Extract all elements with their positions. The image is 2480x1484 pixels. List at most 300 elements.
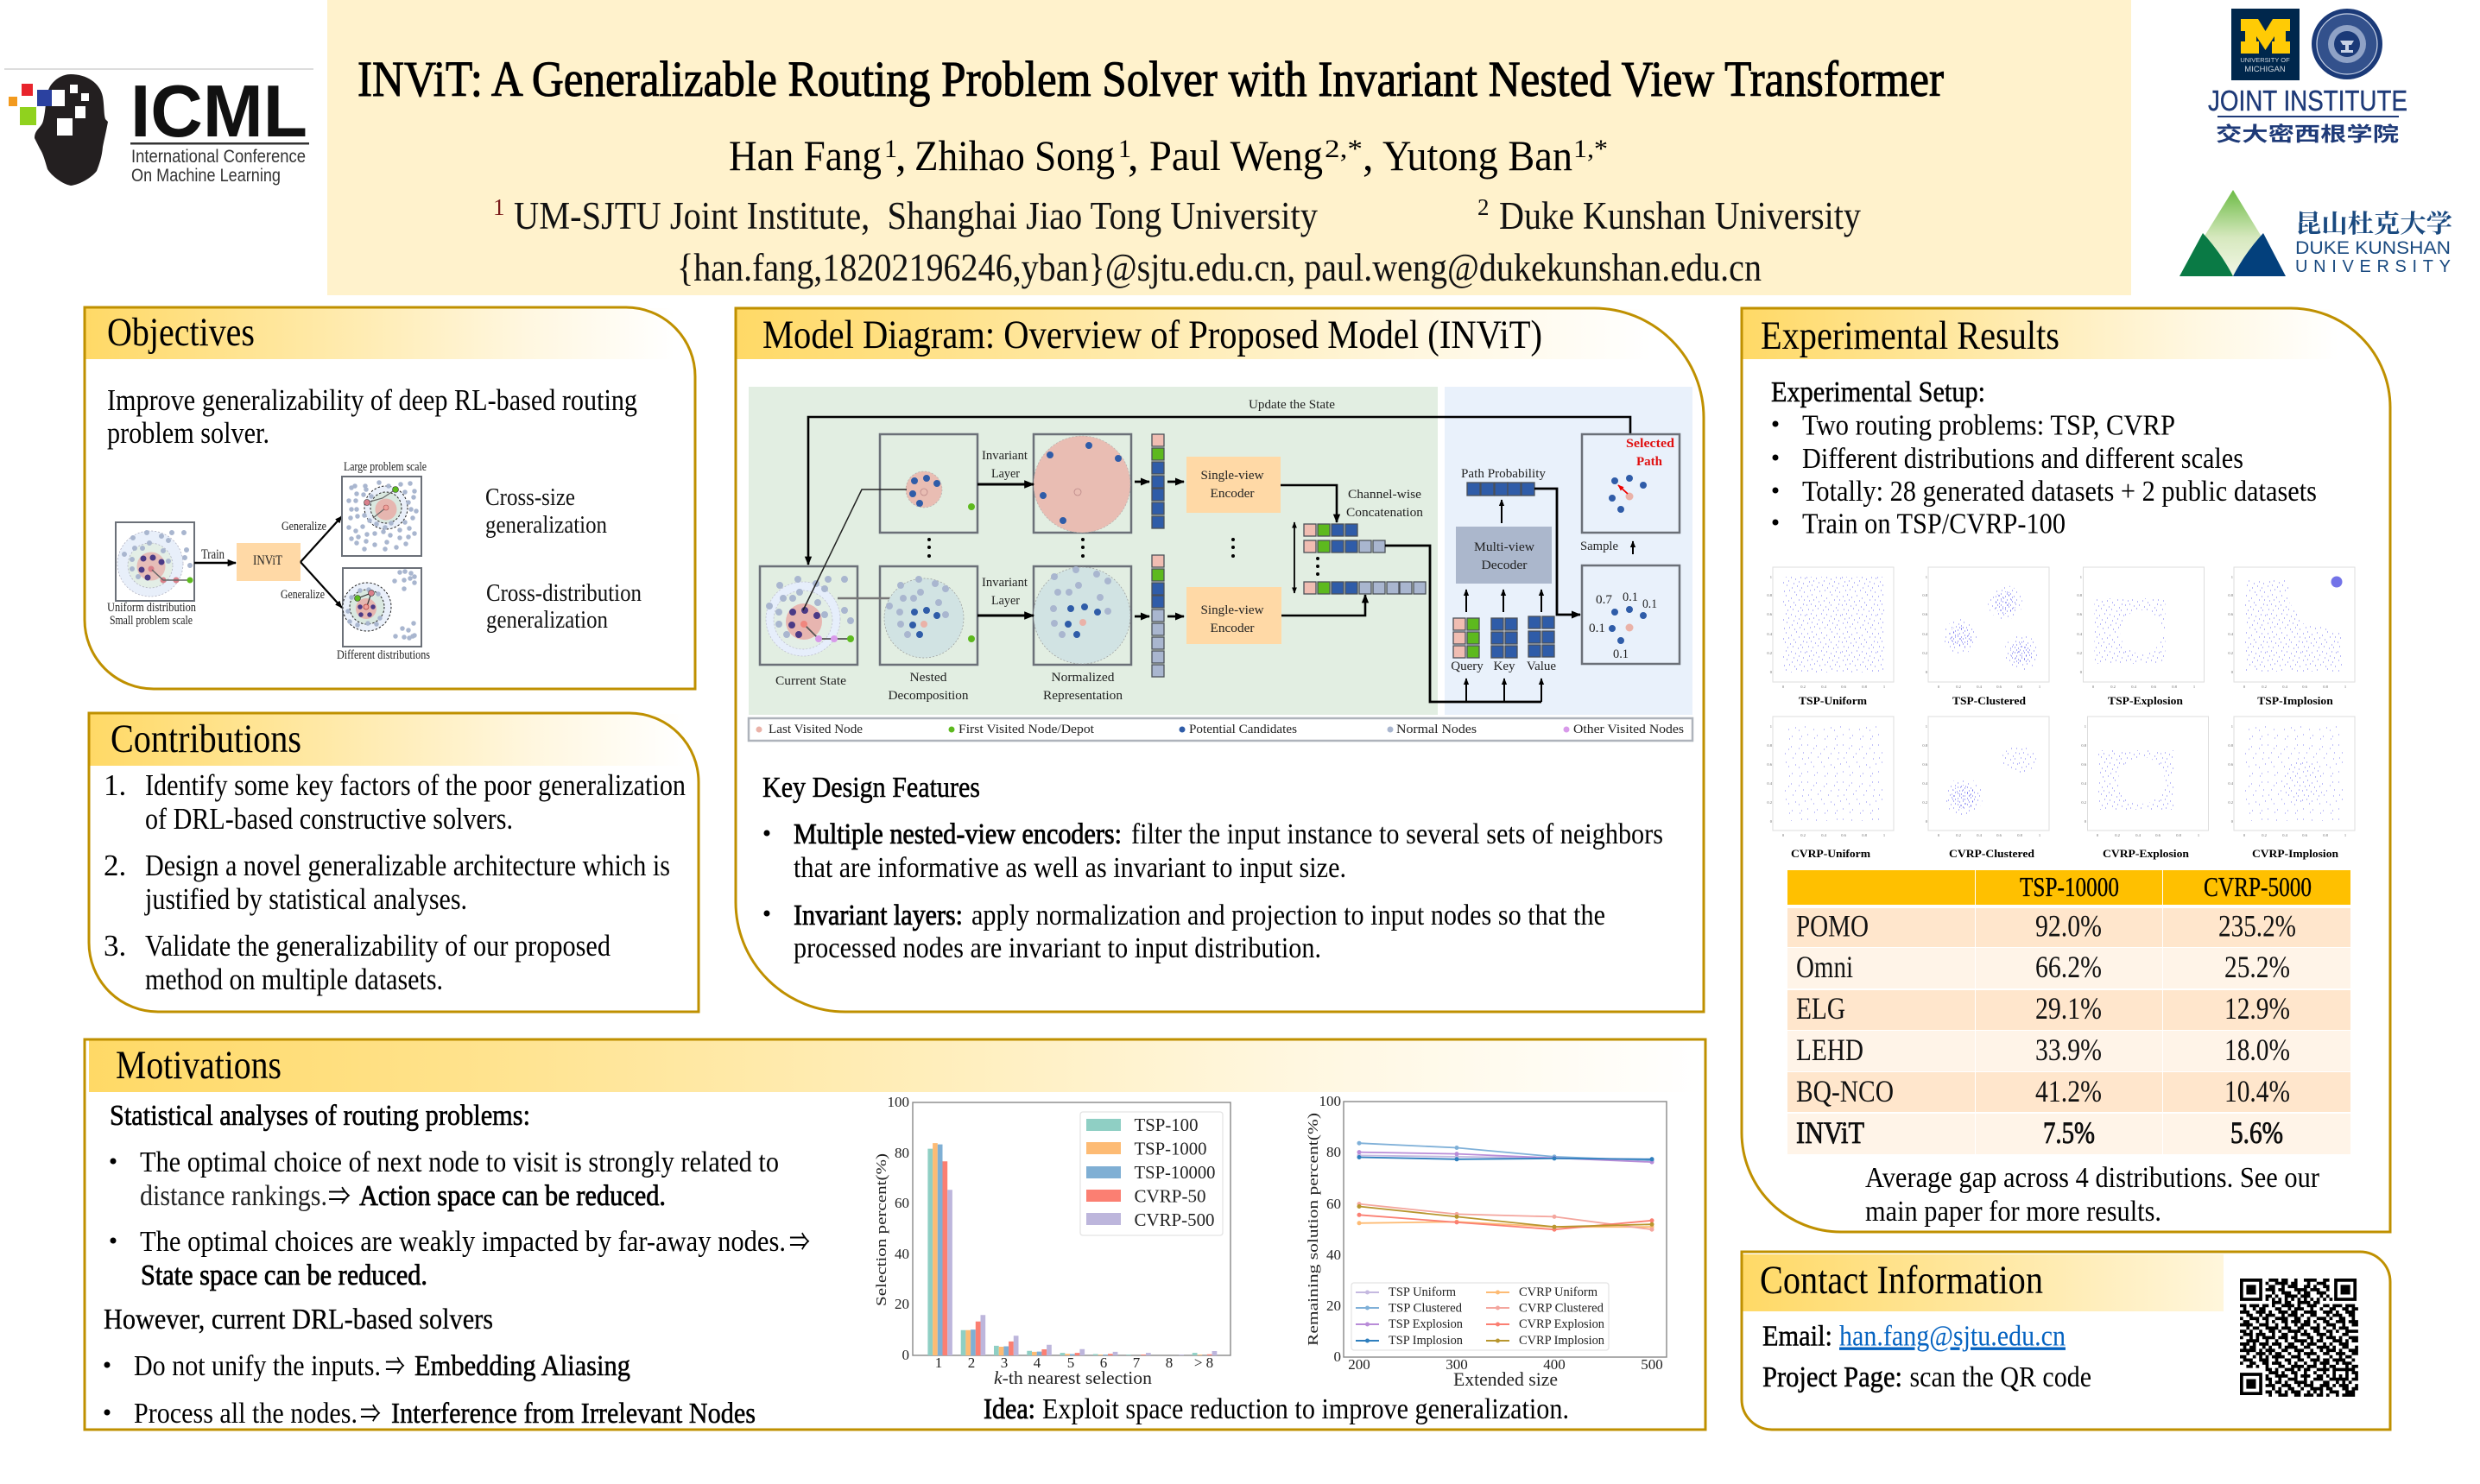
table note: [1865, 1162, 2320, 1228]
scatter: CVRP-Uniform: 0.4: [1821, 833, 1827, 837]
row: LEHD: 33.9%: [2035, 1032, 2102, 1067]
row: BQ-NCO: [1787, 1072, 2350, 1112]
logo: ICML: On Machine Learning: [131, 166, 281, 186]
contribution 3: 3.: [104, 929, 126, 963]
label: channel-wise concatenation: Channel-wise: [1348, 488, 1421, 502]
row: Omni: 66.2%: [2035, 950, 2102, 984]
authors: Paul Weng: [1149, 131, 1323, 180]
table header: [1787, 870, 2350, 905]
scatter: TSP-Uniform: [1767, 567, 1894, 707]
box: top nested view: [880, 434, 977, 533]
scatter: TSP-Explosion: TSP-Explosion: [2108, 694, 2184, 707]
single-view encoder bottom: Single-view: [1200, 603, 1264, 617]
chart legend right: CVRP Uniform: [1519, 1285, 1597, 1299]
scatter: CVRP-Implosion: 0: [2231, 819, 2234, 824]
series: CVRP uniform: [1359, 1222, 1652, 1227]
multi-view decoder: [1456, 527, 1552, 584]
scatter: CVRP-Clustered: 0.8: [2017, 833, 2023, 837]
labels: query key value: Key: [1494, 660, 1515, 673]
figure: training to generalization flow: [107, 460, 430, 662]
caption: large problem scale: Large problem scale: [344, 460, 427, 474]
y ticks right: [1319, 1093, 1341, 1365]
feature: invariant layers: Invariant layers:: [794, 900, 963, 931]
label: invariant layer top: Layer: [991, 467, 1020, 481]
authors: 1,*: [1573, 135, 1608, 163]
scatter: CVRP-Uniform: 0.2: [1800, 833, 1806, 837]
scatter: CVRP-Clustered: 0: [1926, 819, 1928, 824]
scatter: CVRP-Explosion: 0: [2085, 819, 2087, 824]
x ticks: 6: [1100, 1355, 1107, 1371]
scatter: TSP-Explosion: 0.4: [2131, 685, 2137, 689]
label: invariant layer bottom: Layer: [991, 594, 1020, 608]
arrow: decoder to probabilities: [1501, 500, 1503, 523]
label: generalize bottom: Generalize: [281, 588, 325, 602]
scatter: TSP-Explosion: 0.4: [2077, 632, 2083, 636]
box: top normalized view: [1034, 434, 1131, 533]
logo: duke kunshan: DUKE KUNSHAN: [2295, 238, 2451, 258]
contribution 3: method on multiple datasets.: [145, 963, 443, 996]
scatter: CVRP-Clustered: 0.6: [1922, 762, 1928, 767]
heading: key design features: Key Design Features: [762, 772, 980, 804]
row: LEHD: 18.0%: [2224, 1032, 2290, 1067]
experimental setup list: Train on TSP/CVRP-100: [1802, 508, 2066, 540]
authors: Zhihao Song: [914, 131, 1115, 180]
scatter: TSP-Explosion: [2077, 567, 2204, 707]
scatter: CVRP-Explosion: CVRP-Explosion: [2103, 847, 2190, 860]
contribution 2: justified by statistical analyses.: [143, 882, 467, 916]
y ticks right: 60: [1326, 1196, 1341, 1212]
label: sample: [1580, 540, 1633, 554]
table note: main paper for more results.: [1865, 1196, 2161, 1228]
single-view encoder bottom: [1186, 587, 1281, 644]
y ticks right: 40: [1326, 1247, 1341, 1263]
x ticks: 2: [968, 1355, 975, 1371]
scatter: TSP-Clustered: 0: [1926, 670, 1928, 674]
email: Email:: [1762, 1321, 1832, 1352]
scatter: TSP-Uniform: 0.4: [1767, 632, 1773, 636]
bars: TSP-100: [927, 1149, 1197, 1355]
scatter: TSP-Clustered: 0.4: [1922, 632, 1928, 636]
feature: multiple nested-view encoders: Multiple nested-view encoders:: [794, 818, 1122, 850]
label: cross-size: generalization: [485, 512, 607, 539]
panel: model diagram: [736, 308, 1704, 1012]
y ticks: 0: [902, 1347, 909, 1363]
scatter: CVRP-Explosion: [2081, 717, 2209, 860]
scatter: TSP-Explosion: 0.8: [2172, 685, 2178, 689]
embedding column top: [1152, 434, 1164, 528]
arrow: probability to distribution: [1534, 489, 1580, 615]
contribution 1: Identify some key factors of the poor generalization: [145, 768, 686, 802]
value blocks: [1528, 616, 1554, 657]
scatter: TSP-Clustered: 0.6: [1996, 685, 2002, 689]
selected path box: [1582, 434, 1680, 533]
chart legend: TSP-10000: [1135, 1162, 1216, 1183]
chart legend right: CVRP Implosion: [1519, 1334, 1604, 1348]
x ticks: 4: [1034, 1355, 1041, 1371]
scatter: CVRP-Clustered: 0.4: [1922, 781, 1928, 786]
label: invariant layer bottom: [982, 576, 1028, 608]
label: path probability: Path Probability: [1461, 467, 1546, 481]
scatter: CVRP-Implosion: 0.6: [2228, 762, 2234, 767]
chart legend right: TSP Explosion: [1389, 1317, 1463, 1331]
scatter: CVRP-Uniform: 0.4: [1767, 781, 1773, 786]
row: LEHD: LEHD: [1796, 1032, 1863, 1067]
legend: node types: Potential Candidates: [1189, 723, 1297, 736]
bullet: far-away nodes: State space can be reduced.: [141, 1260, 427, 1291]
scatter: TSP-Explosion: 0.2: [2077, 651, 2082, 655]
authors: 1: [884, 135, 897, 163]
row: ELG: 29.1%: [2035, 991, 2102, 1026]
scatter: TSP-Explosion: 0.6: [2077, 612, 2083, 616]
chart legend right: CVRP Clustered: [1519, 1302, 1604, 1316]
scatter: TSP-Implosion: 0.4: [2282, 685, 2288, 689]
scatter: CVRP-Explosion: 0.8: [2176, 833, 2182, 837]
scatter: TSP-Implosion: 0.2: [2228, 651, 2233, 655]
authors: ,: [1363, 131, 1373, 180]
idea callout: Exploit space reduction to improve generalization.: [1042, 1393, 1569, 1425]
single-view encoder bottom: Encoder: [1211, 622, 1254, 635]
path probability vector: [1467, 483, 1534, 496]
legend: node types: Normal Nodes: [1396, 723, 1477, 736]
feature: invariant layers: apply normalization and projection to input nodes so that the: [971, 900, 1605, 931]
scatter: TSP-Implosion: 0.4: [2228, 632, 2234, 636]
scatter: TSP-Uniform: 0.6: [1767, 612, 1773, 616]
table header: CVRP-5000: [2204, 871, 2312, 902]
bullet: distance rankings: [111, 1146, 779, 1212]
email: [1762, 1321, 2066, 1352]
multi-view decoder: Decoder: [1482, 559, 1527, 572]
label: cross-size: [485, 484, 607, 539]
arrow: generalize down: [301, 562, 342, 608]
embedding column bottom: [1152, 555, 1164, 677]
authors: 2,*: [1325, 135, 1363, 163]
concat row 3: [1304, 582, 1426, 594]
heading: contributions: Contributions: [111, 717, 301, 761]
single-view encoder top: Encoder: [1211, 487, 1254, 501]
chart legend right: TSP Uniform: [1389, 1285, 1456, 1299]
y ticks right: 80: [1326, 1144, 1341, 1160]
scatter: TSP-Uniform: 0.8: [1767, 593, 1773, 597]
row: BQ-NCO: 10.4%: [2224, 1074, 2290, 1108]
scatter: TSP-Uniform: 1: [1883, 685, 1885, 689]
label: nested decomposition: Nested: [910, 671, 947, 685]
bars: CVRP-50: [943, 1161, 1212, 1355]
legend: node types: First Visited Node/Depot: [958, 723, 1095, 736]
heading: objectives: Objectives: [107, 310, 255, 355]
scatter: TSP-Implosion: 0.6: [2228, 612, 2234, 616]
panel: experimental results: [1742, 308, 2390, 1232]
x ticks right: 500: [1641, 1356, 1663, 1373]
x ticks: [935, 1355, 1213, 1371]
logo: joint institute: MICHIGAN: [2244, 65, 2286, 74]
concat row 2: [1304, 540, 1385, 553]
experimental setup list: Two routing problems: TSP, CVRP: [1802, 409, 2175, 442]
scatter: TSP-Explosion: 0.2: [2110, 685, 2116, 689]
heading: experimental results: Experimental Results: [1761, 313, 2059, 358]
scatter: CVRP-Explosion: 0.4: [2081, 781, 2087, 786]
label: sample: Sample: [1580, 540, 1618, 553]
x ticks: 5: [1067, 1355, 1074, 1371]
label: cross-distribution: [486, 580, 642, 634]
scatter: TSP-Explosion: 0.6: [2151, 685, 2157, 689]
x ticks: 7: [1133, 1355, 1141, 1371]
scatter: CVRP-Uniform: 0.6: [1841, 833, 1847, 837]
selected path box: Selected: [1626, 437, 1675, 451]
y ticks right: 20: [1326, 1298, 1341, 1314]
scatter: CVRP-Uniform: 0.2: [1767, 800, 1772, 805]
logo: joint institute: [2208, 9, 2407, 145]
chart legend: [1080, 1112, 1223, 1235]
bullet: irrelevant nodes: Process all the nodes.: [134, 1398, 357, 1430]
x ticks: > 8: [1194, 1355, 1213, 1371]
scatter: CVRP-Implosion: 0.8: [2323, 833, 2329, 837]
row: ELG: ELG: [1796, 991, 1845, 1026]
series: TSP clustered: [1359, 1143, 1652, 1160]
bullet: embedding aliasing: ⇒: [385, 1353, 405, 1381]
objective statement: problem solver.: [107, 416, 269, 450]
labels: query key value: Query: [1451, 660, 1484, 673]
series: CVRP implosion: [1359, 1207, 1652, 1227]
caption: uniform small: Small problem scale: [110, 614, 193, 628]
label: nested decomposition: [888, 671, 969, 703]
arrows: feed up: [1466, 679, 1541, 702]
scatter: TSP-Explosion: 0: [2080, 670, 2083, 674]
concat row 1: [1304, 524, 1357, 536]
authors: [729, 131, 1608, 180]
scatter: TSP-Uniform: 0: [1782, 685, 1785, 689]
chart legend right: TSP Clustered: [1389, 1302, 1462, 1316]
bullet: distance rankings: distance rankings.: [140, 1180, 327, 1212]
contribution 2: [104, 849, 670, 916]
x ticks right: 300: [1446, 1356, 1468, 1373]
project page: scan the QR code: [1910, 1361, 2091, 1393]
chart legend right: TSP Implosion: [1389, 1334, 1463, 1348]
scatter: TSP-Explosion: 0.8: [2077, 593, 2083, 597]
panel: objectives: [85, 307, 695, 689]
selected path box: Path: [1636, 455, 1663, 469]
scatter: TSP-Clustered: 1: [1926, 575, 1927, 579]
y ticks right: 100: [1319, 1093, 1341, 1109]
scatter: CVRP-Clustered: 0.4: [1977, 833, 1983, 837]
box: nested decomposition: [880, 566, 977, 665]
scatter: CVRP-Clustered: 0.8: [1922, 743, 1928, 748]
arrow: train: [194, 562, 236, 564]
label: channel-wise concatenation: [1346, 488, 1424, 520]
line chart: remaining solution percent: [1305, 1093, 1667, 1390]
scatter: CVRP-Clustered: 0.6: [1996, 833, 2002, 837]
arrow: encoder bottom to concat: [1281, 595, 1365, 616]
scatter: CVRP-Implosion: CVRP-Implosion: [2252, 847, 2339, 860]
label: cross-distribution: generalization: [486, 607, 608, 634]
scatter: CVRP-Implosion: [2228, 717, 2355, 860]
series: TSP implosion: [1359, 1157, 1652, 1159]
arrows: invariant layers: [977, 484, 1034, 616]
y ticks: 40: [895, 1246, 909, 1262]
bullet: irrelevant nodes: [104, 1398, 756, 1430]
contribution 2: Design a novel generalizable architecture which is: [145, 849, 670, 882]
label: nested decomposition: Decomposition: [888, 689, 969, 703]
scatter: TSP-Implosion: 0.8: [2228, 593, 2234, 597]
logo: ICML: [4, 68, 313, 186]
bullet: far-away nodes: ⇒: [789, 1228, 810, 1257]
scatter: TSP-Implosion: 0.6: [2302, 685, 2308, 689]
subheading: however: However, current DRL-based solvers: [104, 1304, 493, 1336]
row: BQ-NCO: BQ-NCO: [1796, 1074, 1894, 1108]
QR code: [2240, 1280, 2358, 1395]
scatter: TSP-Clustered: 0.2: [1956, 685, 1961, 689]
bullet: far-away nodes: The optimal choices are weakly impacted by far-away nodes.: [140, 1226, 786, 1258]
scatter: TSP-Uniform: TSP-Uniform: [1799, 694, 1867, 707]
label: normalized representation: Representation: [1043, 689, 1123, 703]
caption: uniform small: [107, 601, 196, 628]
scatter: TSP-Clustered: [1922, 567, 2049, 707]
scatter: CVRP-Explosion: 1: [2198, 833, 2199, 837]
bullet: distance rankings: ⇒: [328, 1183, 351, 1211]
y ticks: 20: [895, 1296, 909, 1312]
experimental setup list: Different distributions and different scales: [1802, 443, 2243, 475]
scatter: CVRP-Uniform: 0.6: [1767, 762, 1773, 767]
affiliation 2: Duke Kunshan University: [1499, 194, 1861, 237]
feedback arrow: update the state: [808, 417, 1630, 565]
logo: duke kunshan: [2179, 190, 2452, 276]
arrows: to encoders: [1135, 482, 1184, 616]
experimental setup list: Experimental Setup:: [1771, 376, 1985, 408]
scatter: CVRP-Clustered: 0: [1938, 833, 1940, 837]
legend: node types: Other Visited Nodes: [1573, 723, 1684, 736]
project page: [1762, 1361, 2091, 1393]
label: generalize top: Generalize: [282, 520, 326, 534]
scatter: CVRP-Clustered: 1: [2039, 833, 2040, 837]
x ticks: 3: [1001, 1355, 1008, 1371]
scatter: TSP-Clustered: TSP-Clustered: [1952, 694, 2027, 707]
affiliation 1: UM-SJTU Joint Institute, Shanghai Jiao Tong University: [514, 194, 1318, 237]
legend: node types: [749, 718, 1692, 741]
continuation dots: [929, 540, 1318, 574]
scatter: TSP-Explosion: 1: [2080, 575, 2082, 579]
probability box: 0.1: [1642, 597, 1657, 611]
row: POMO: 235.2%: [2218, 908, 2296, 943]
bars: TSP-1000: [933, 1143, 1202, 1355]
label: invariant layer bottom: Invariant: [982, 576, 1028, 590]
scatter: CVRP-Implosion: 0.4: [2282, 833, 2288, 837]
affiliation 1: 1: [493, 194, 504, 220]
scatter: CVRP-Explosion: 0.8: [2081, 743, 2087, 748]
bullet: irrelevant nodes: Interference from Irrelevant Nodes: [391, 1398, 756, 1430]
scatter: CVRP-Uniform: 0: [1770, 819, 1773, 824]
y ticks: 100: [888, 1094, 909, 1110]
scatter: CVRP-Clustered: 0.2: [1922, 800, 1927, 805]
diagram: model architecture: [749, 387, 1692, 741]
x ticks right: 200: [1348, 1356, 1370, 1373]
scatter: TSP-Clustered: 0.6: [1922, 612, 1928, 616]
labels: query key value: Value: [1527, 660, 1556, 673]
scatter: CVRP-Uniform: 1: [1770, 724, 1772, 729]
authors: Yutong Ban: [1382, 131, 1572, 180]
x ticks: 8: [1166, 1355, 1173, 1371]
row: Omni: 25.2%: [2224, 950, 2290, 984]
arrow: multi-view double: [1294, 522, 1295, 593]
scatter: CVRP-Implosion: 1: [2344, 833, 2346, 837]
label: cross-size: Cross-size: [485, 484, 575, 511]
panel: contact information: [1742, 1252, 2390, 1430]
row: POMO: POMO: [1796, 908, 1869, 943]
y label: Selection percent(%): [873, 1153, 889, 1306]
bullet: embedding aliasing: Do not unify the inputs.: [134, 1350, 381, 1382]
probability box: 0.1: [1613, 647, 1629, 661]
scatter: CVRP-Uniform: 0: [1782, 833, 1785, 837]
contribution 2: 2.: [104, 849, 126, 882]
scatter: CVRP-Uniform: 0.8: [1767, 743, 1773, 748]
scatter: TSP-Implosion: 1: [2231, 575, 2233, 579]
feature: multiple nested-view encoders: [763, 818, 1663, 884]
bar chart: k-th nearest selection: [873, 1094, 1231, 1388]
arrows: into decoder: [1466, 590, 1541, 612]
bullet: distance rankings: Action space can be reduced.: [359, 1180, 666, 1212]
scatter: CVRP-Clustered: 0.2: [1956, 833, 1961, 837]
authors: 1: [1118, 135, 1131, 163]
objective statement: Improve generalizability of deep RL-based routing: [107, 383, 637, 417]
box: normalized representation: [1034, 566, 1131, 665]
contribution 1: [104, 768, 686, 836]
y label right: Remaining solution percent(%): [1305, 1113, 1321, 1346]
experimental setup list: Totally: 28 generated datasets + 2 public datasets: [1802, 476, 2317, 508]
x ticks: 1: [935, 1355, 942, 1371]
scatter: TSP-Implosion: 0.2: [2262, 685, 2267, 689]
label: train: Train: [201, 547, 225, 562]
row: ELG: [1787, 990, 2350, 1030]
email: han.fang@sjtu.edu.cn: [1839, 1321, 2066, 1352]
row: BQ-NCO: 41.2%: [2035, 1074, 2102, 1108]
logo: duke kunshan: 昆山杜克大学: [2295, 210, 2452, 238]
scatter: TSP-Explosion: 0: [2092, 685, 2095, 689]
scatter: CVRP-Implosion: 0: [2243, 833, 2246, 837]
scatter: TSP-Clustered: 1: [2039, 685, 2040, 689]
probability box: 0.1: [1623, 590, 1638, 604]
scatter: TSP-Clustered: 0.8: [2017, 685, 2023, 689]
scatter: TSP-Clustered: 0.2: [1922, 651, 1927, 655]
large scale box: [342, 477, 421, 556]
scatter: CVRP-Explosion: 1: [2085, 724, 2086, 729]
bullet: irrelevant nodes: ⇒: [360, 1400, 381, 1429]
x label: k-th nearest selection: [994, 1367, 1153, 1388]
logo: ICML: International Conference: [131, 147, 306, 167]
title: INViT: A Generalizable Routing Problem Solver with Invariant Nested View Transformer: [357, 51, 1944, 107]
label: invariant layer top: [982, 449, 1028, 481]
row: Omni: [1787, 948, 2350, 988]
contribution 1: 1.: [104, 768, 126, 802]
arrow: encoder top to concat: [1281, 485, 1337, 522]
heading: motivations: Motivations: [116, 1043, 282, 1088]
logo: joint institute: UNIVERSITY OF: [2240, 56, 2290, 64]
label: invariant layer top: Invariant: [982, 449, 1028, 463]
scatter: TSP-Uniform: 1: [1770, 575, 1772, 579]
chart legend: CVRP-500: [1135, 1209, 1214, 1230]
scatter: TSP-Clustered: 0.4: [1977, 685, 1983, 689]
scatter: CVRP-Uniform: CVRP-Uniform: [1791, 847, 1870, 860]
y ticks: 60: [895, 1195, 909, 1211]
connector: nested decomposition links: [803, 489, 907, 610]
scatter: CVRP-Implosion: 0.2: [2228, 800, 2233, 805]
scatter: CVRP-Uniform: 0.8: [1862, 833, 1868, 837]
different distribution box: [343, 568, 421, 647]
connector: current state to nested: [838, 597, 889, 599]
single-view encoder top: [1186, 457, 1281, 513]
scatter: TSP-Implosion: 0: [2231, 670, 2234, 674]
scatter: CVRP-Clustered: [1922, 717, 2049, 860]
bars: CVRP-500: [947, 1190, 1217, 1355]
key blocks: [1491, 618, 1517, 658]
logo: joint institute: JOINT INSTITUTE: [2208, 85, 2407, 117]
